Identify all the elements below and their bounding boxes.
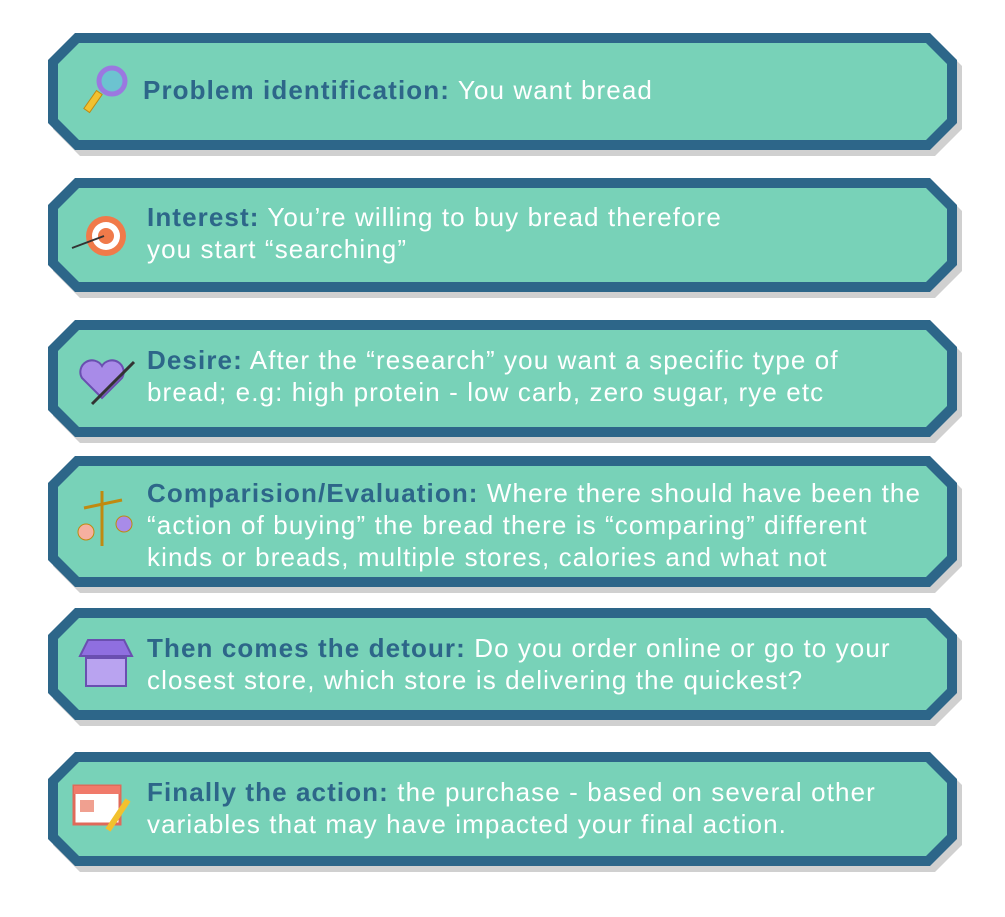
icon: store — [78, 639, 134, 687]
text — [147, 777, 876, 839]
text: variables that may have impacted your final action. — [147, 809, 787, 839]
text: Then comes the detour: Do you order online or go to your — [147, 633, 891, 663]
text: Comparision/Evaluation: Where there should have been the — [147, 478, 921, 508]
text — [147, 633, 891, 695]
banner 4: comparison — [48, 456, 962, 593]
text — [147, 202, 722, 264]
text: Interest: You’re willing to buy bread therefore — [147, 202, 722, 232]
text: you start “searching” — [147, 234, 407, 264]
text — [147, 478, 921, 572]
icon: target — [72, 216, 126, 256]
text: Desire: After the “research” you want a specific type of — [147, 345, 839, 375]
banner 1: problem identification — [48, 33, 962, 156]
banner 2: interest — [48, 178, 962, 298]
icon: heart with brush — [79, 359, 135, 405]
banner 6: final action — [48, 752, 962, 872]
text: “action of buying” the bread there is “comparing” different — [147, 510, 868, 540]
text: closest store, which store is delivering the quickest? — [147, 665, 803, 695]
text: kinds or breads, multiple stores, calories and what not — [147, 542, 827, 572]
text: bread; e.g: high protein - low carb, zero sugar, rye etc — [147, 377, 824, 407]
banner 3: desire — [48, 320, 962, 443]
text: Finally the action: the purchase - based on several other — [147, 777, 876, 807]
text: Problem identification: You want bread — [143, 75, 653, 105]
icon: scales — [78, 491, 132, 546]
text — [147, 345, 839, 407]
icon: magnifying glass — [83, 66, 128, 114]
icon: web page with pencil — [72, 784, 130, 832]
banner 5: detour — [48, 608, 962, 726]
